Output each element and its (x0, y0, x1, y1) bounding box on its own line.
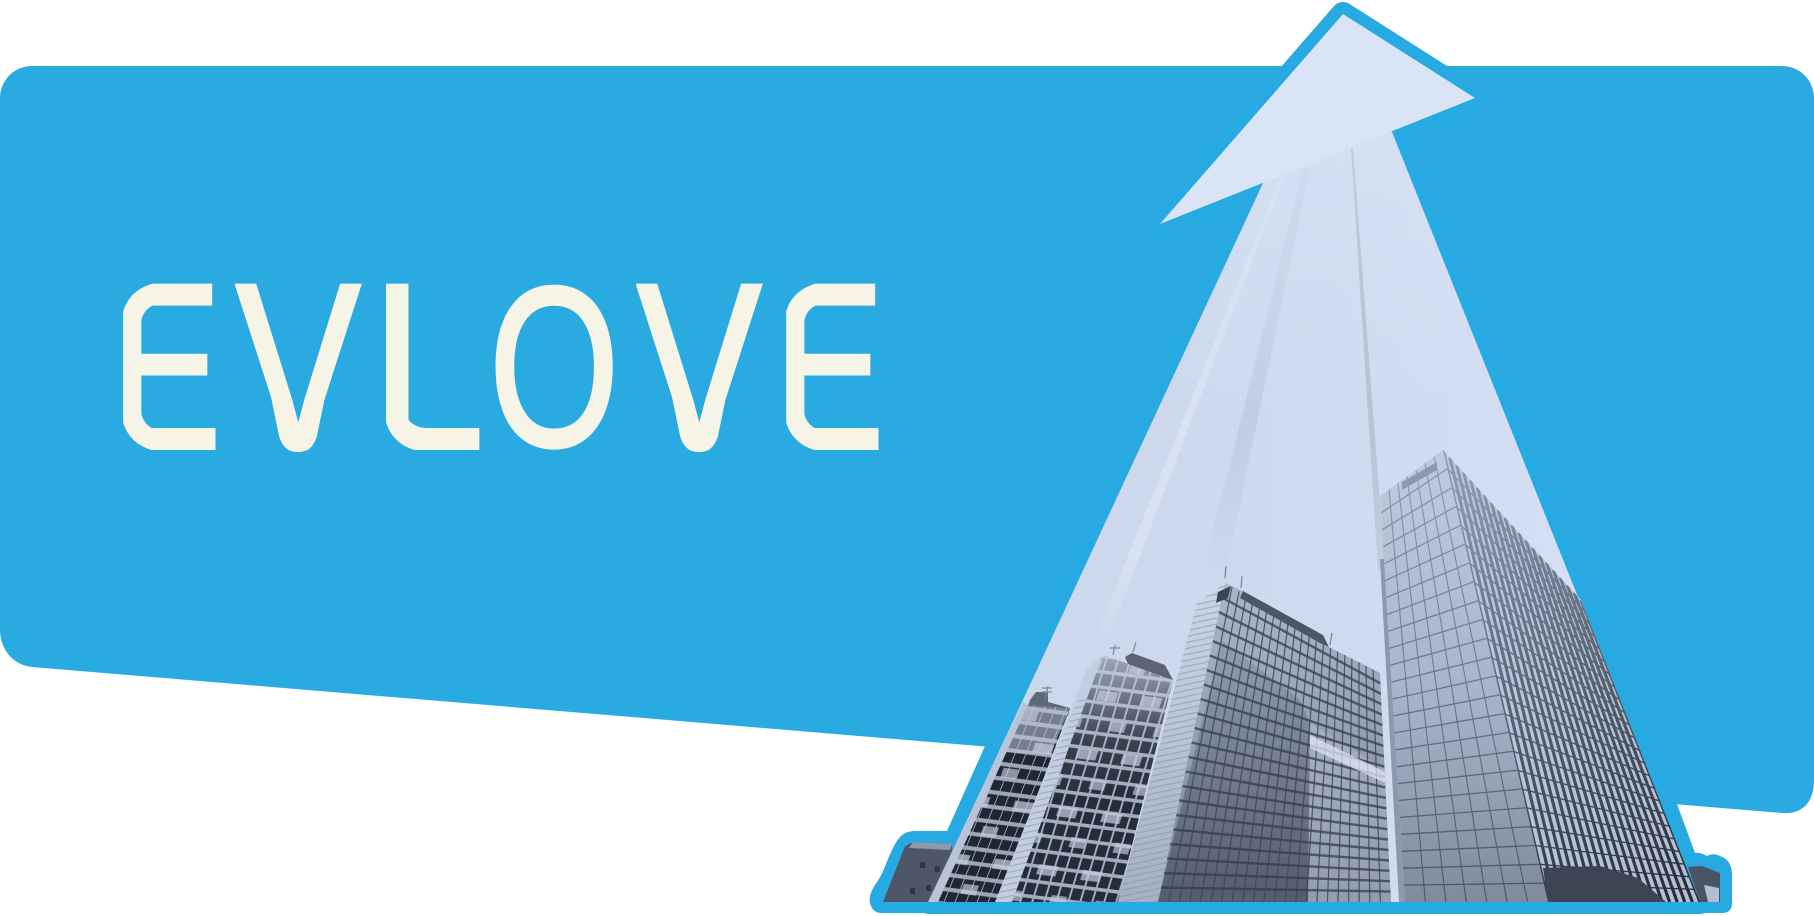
arrow outline (870, 14, 1732, 913)
arrow head (1160, 14, 1475, 224)
title: EVLOVE: E (111, 235, 222, 499)
title: EVLOVE (111, 235, 885, 499)
title: EVLOVE: O (489, 240, 619, 495)
glass facade (1158, 583, 1391, 902)
title: EVLOVE: V (637, 235, 762, 499)
sky streaks in shaft (1090, 100, 1490, 650)
building three (1118, 566, 1400, 910)
arrow and skyline graphic (870, 14, 1732, 913)
tower left face (1380, 450, 1548, 902)
title: EVLOVE: E (774, 235, 885, 499)
building one (928, 686, 1070, 902)
title: EVLOVE: V (236, 235, 361, 499)
building two (995, 642, 1173, 902)
tower right face (1440, 445, 1705, 905)
small right building (1688, 866, 1720, 902)
main tower (1370, 440, 1705, 910)
light facade (1118, 583, 1225, 902)
title: EVLOVE: L (371, 235, 485, 499)
arrow shaft (929, 100, 1700, 902)
small left building (883, 842, 955, 902)
tower lobby (1543, 866, 1666, 902)
tower side strip (1380, 559, 1405, 902)
